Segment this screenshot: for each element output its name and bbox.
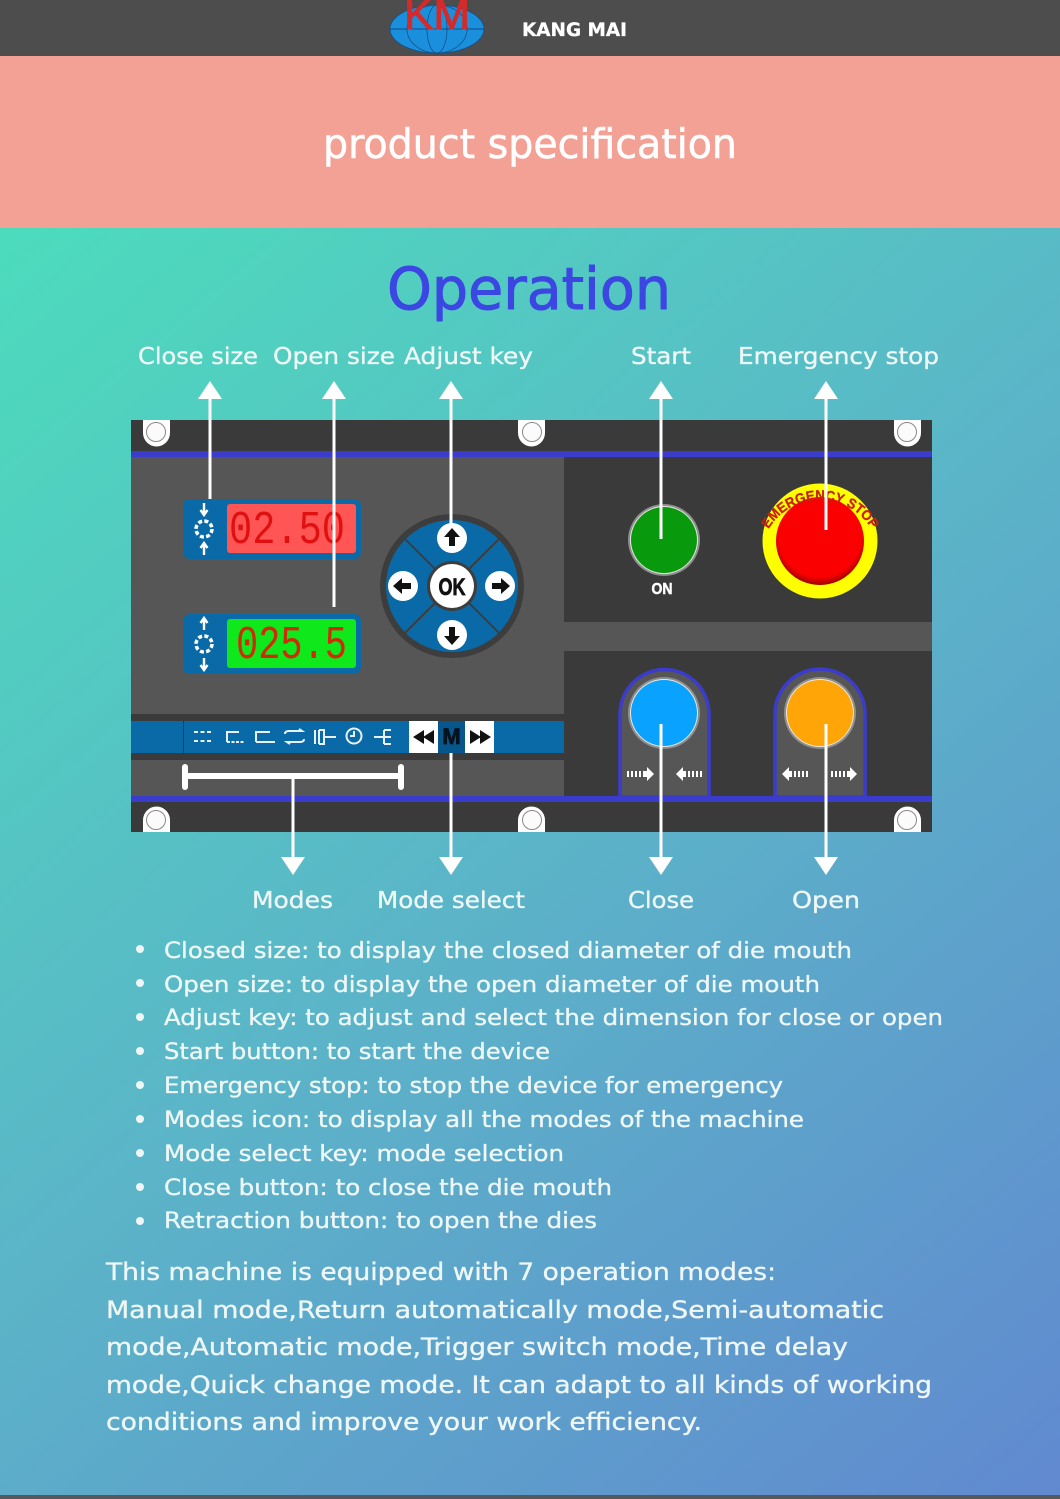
header bar xyxy=(390,0,626,54)
paragraph: operation modes: mode,Quick change mode. It can adapt to all kinds of working xyxy=(106,1371,932,1399)
bottom labels: Mode select xyxy=(377,888,525,914)
arrow: close xyxy=(649,724,673,875)
banner: product specification: product specification xyxy=(323,120,737,168)
top labels: Emergency stop xyxy=(738,344,939,370)
top labels: Start xyxy=(631,344,691,370)
bottom labels: Modes xyxy=(252,888,333,914)
arrow: open xyxy=(814,724,838,875)
bottom labels: Close xyxy=(628,888,694,914)
open size display: 025.5 xyxy=(236,620,347,673)
close size display xyxy=(183,499,361,559)
brand name: KANG MAI xyxy=(522,19,627,41)
paragraph: operation modes xyxy=(105,1258,932,1436)
logo: KM globe xyxy=(390,0,484,53)
adjust key dial: OK xyxy=(438,574,466,601)
top labels: Open size xyxy=(273,344,395,370)
heading: Operation: Operation xyxy=(387,255,671,323)
paragraph: operation modes: Manual mode,Return automatically mode,Semi-automatic xyxy=(106,1296,884,1324)
top labels: Close size xyxy=(138,344,258,370)
paragraph: operation modes: This machine is equipped with 7 operation modes: xyxy=(105,1258,776,1286)
paragraph: operation modes: mode,Automatic mode,Trigger switch mode,Time delay xyxy=(106,1333,848,1361)
start button xyxy=(628,504,700,598)
top labels xyxy=(138,344,939,370)
control panel xyxy=(131,420,932,832)
open button xyxy=(775,669,865,797)
top labels: Adjust key xyxy=(404,344,533,370)
bullet list: Retraction button: to open the dies xyxy=(164,1208,597,1234)
mounting screws xyxy=(143,420,921,832)
mode select keys: M xyxy=(442,724,461,749)
bullet list: Close button: to close the die mouth xyxy=(164,1175,612,1201)
arrow: open size xyxy=(322,381,346,607)
arrow: close size xyxy=(198,381,222,499)
bottom labels: Open xyxy=(792,888,860,914)
adjust key dial xyxy=(380,514,524,658)
open size display xyxy=(183,614,361,674)
arrow: start xyxy=(649,381,673,539)
bullet list: Start button: to start the device xyxy=(164,1039,550,1065)
mode icons xyxy=(183,721,391,753)
emergency stop button: EMERGENCY STOP xyxy=(760,490,878,529)
modes bracket and arrow xyxy=(182,764,404,875)
arrow: adjust key xyxy=(439,381,463,526)
close button xyxy=(620,670,709,797)
close size display: 02.50 xyxy=(229,505,345,558)
bullet list: Modes icon: to display all the modes of the machine xyxy=(164,1107,804,1133)
bullet list: Mode select key: mode selection xyxy=(164,1141,564,1167)
start button: ON xyxy=(652,581,672,598)
mode select keys xyxy=(409,721,494,753)
footer strip xyxy=(0,1495,1060,1499)
bottom labels xyxy=(252,888,860,914)
arrow: emergency stop xyxy=(814,381,838,530)
bullet list: Emergency stop: to stop the device for emergency xyxy=(164,1073,783,1099)
paragraph: operation modes: conditions and improve your work efficiency. xyxy=(106,1408,702,1436)
banner: product specification xyxy=(0,56,1060,228)
arrow: mode select xyxy=(439,753,463,875)
bullet list xyxy=(136,938,943,1234)
bullet list: Closed size: to display the closed diameter of die mouth xyxy=(164,938,852,964)
bullet list: Open size: to display the open diameter of die mouth xyxy=(164,972,820,998)
bullet list: Adjust key: to adjust and select the dimension for close or open xyxy=(164,1005,943,1031)
emergency stop button xyxy=(760,484,878,598)
